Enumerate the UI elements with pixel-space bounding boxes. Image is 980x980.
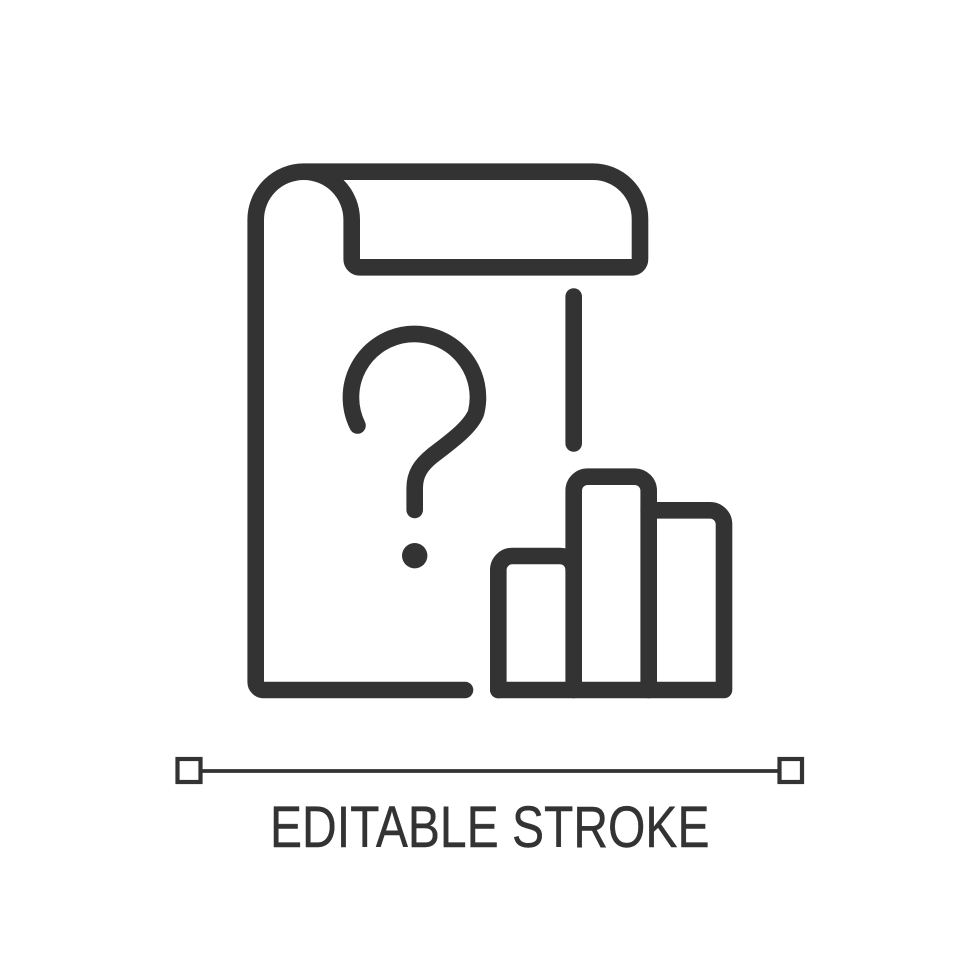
- caption: EDITABLE STROKE: [270, 795, 710, 860]
- editable stroke slider: [178, 759, 802, 782]
- question mark: [351, 334, 478, 510]
- question mark dot: [402, 543, 427, 568]
- bar chart: [498, 477, 724, 690]
- document outline: [256, 172, 640, 690]
- icon: document scroll with question mark and bar chart: [256, 172, 724, 690]
- vertical line: [565, 296, 582, 444]
